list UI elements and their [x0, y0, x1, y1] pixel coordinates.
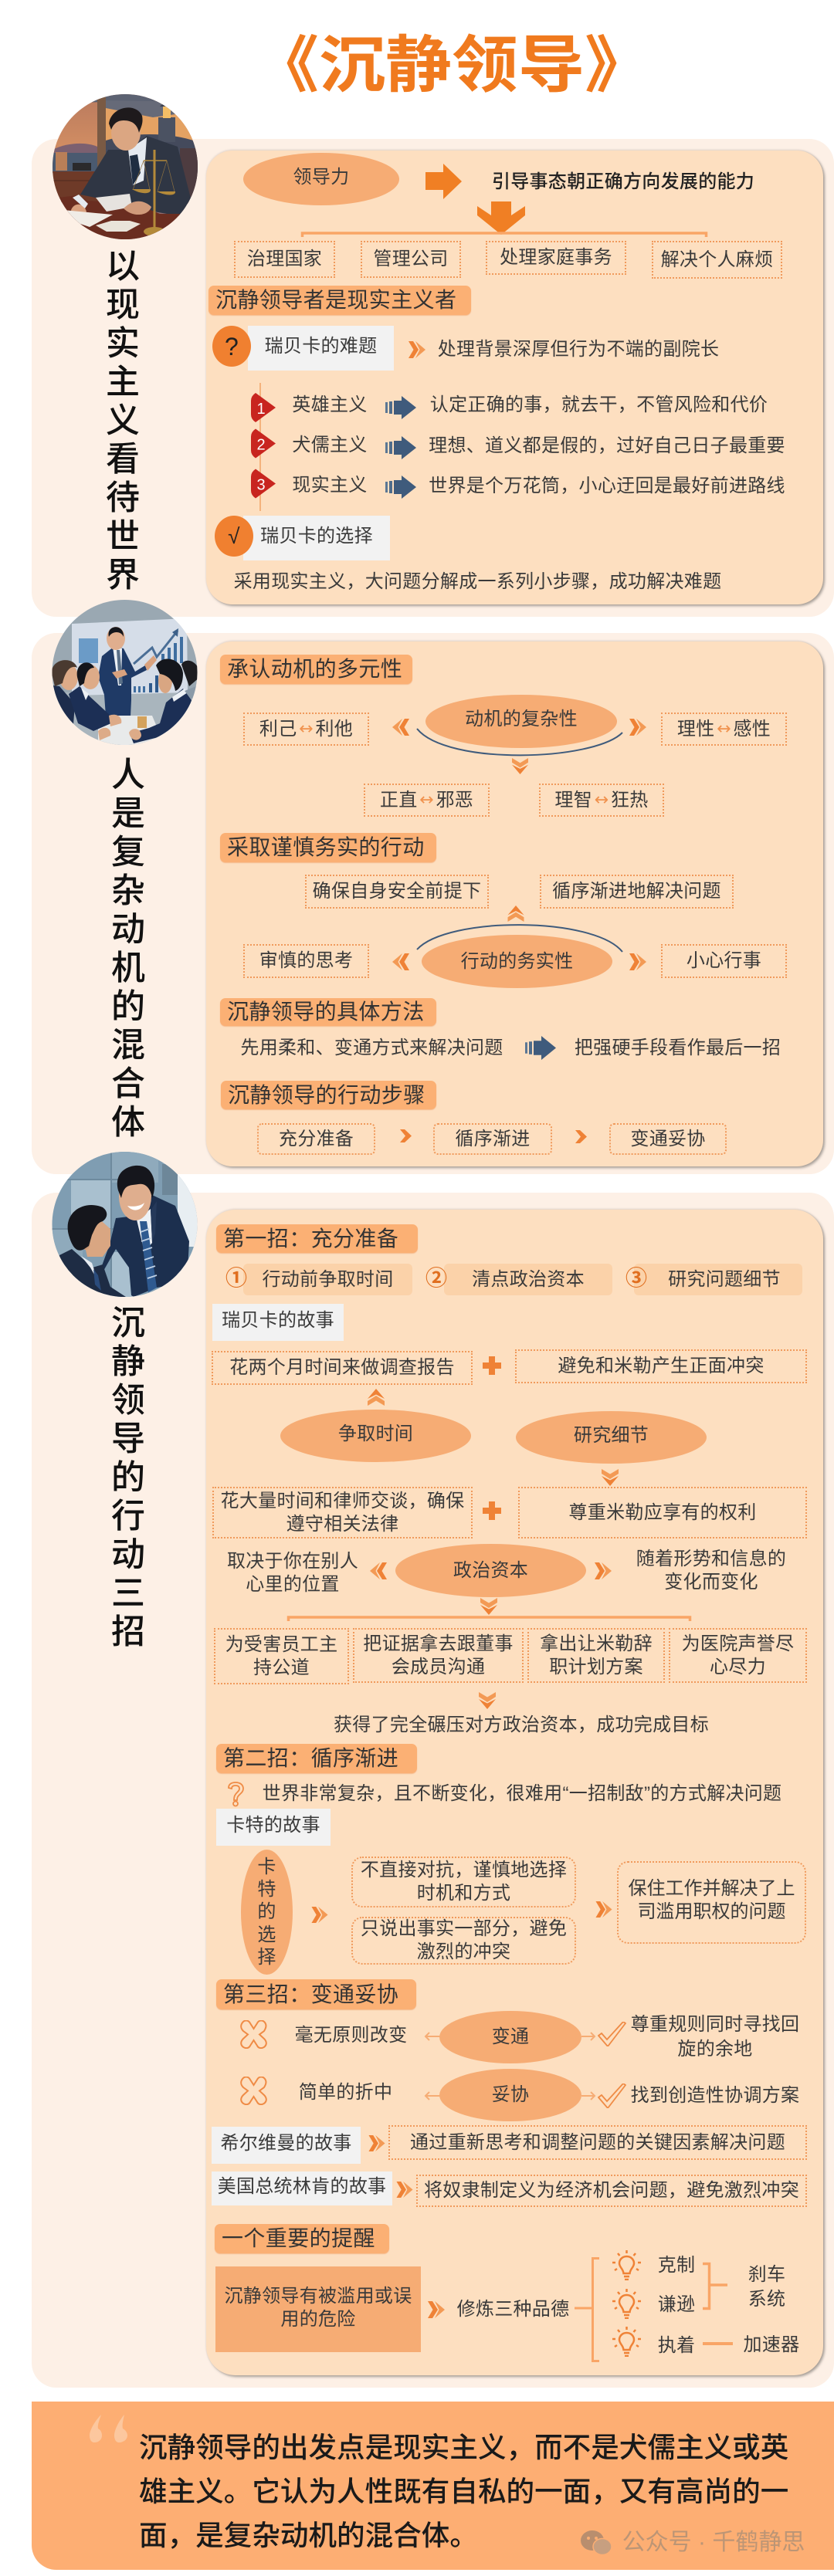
- box: 利己利他: ↔: [299, 719, 314, 738]
- box: 管理公司: 管理公司: [373, 249, 449, 269]
- text: 克制: 克制: [658, 2255, 695, 2276]
- heading: 第一招: 第一招：充分准备: [223, 1226, 398, 1251]
- label box: 瑞贝卡的难题: 瑞贝卡的难题: [265, 336, 377, 357]
- box: 处理家庭事务: [486, 241, 626, 275]
- icon: chevron: [400, 1129, 412, 1142]
- box: 保住工作: [617, 1861, 806, 1944]
- box: 滥用危险: [215, 2266, 421, 2352]
- ellipse: 政治资本: 政治资本: [453, 1559, 528, 1581]
- illustration: 会议演讲: [53, 600, 198, 745]
- ellipse: 行动的务实性: 行动的务实性: [461, 951, 573, 971]
- text: 尊重规则: 尊重规则同时寻找回: [631, 2014, 799, 2035]
- ellipse: 变通: [439, 2011, 581, 2063]
- text: 现实主义定义: 世界是个万花筒，小心迂回是最好前进路线: [429, 476, 785, 496]
- box: 律师交谈: 花大量时间和律师交谈，确保: [221, 1490, 464, 1511]
- section heading: 以现实主义看待世界: 以现实主义看待世界: [100, 248, 138, 595]
- text: 选择结果: 采用现实主义，大问题分解成一系列小步骤，成功解决难题: [234, 571, 721, 592]
- box: 只说出部分事实: 只说出事实一部分，避免: [361, 1918, 567, 1939]
- box: 尊重权利: 尊重米勒应享有的权利: [568, 1502, 757, 1522]
- item box: 清点政治资本: 清点政治资本: [472, 1269, 585, 1289]
- arrow: right small: [581, 2032, 596, 2041]
- icon: check: [598, 2083, 626, 2108]
- ellipse: 妥协: 妥协: [492, 2084, 529, 2105]
- icon: chevrons right: [629, 953, 646, 970]
- box: 医院声誉: 心尽力: [710, 1657, 766, 1677]
- marker: 2: 2: [256, 437, 266, 454]
- box: 滥用危险: 用的危险: [280, 2309, 356, 2330]
- label box: 瑞贝卡的故事: 瑞贝卡的故事: [222, 1310, 334, 1331]
- box: 审慎的思考: [243, 944, 369, 978]
- arrow: blue: [385, 476, 416, 499]
- icon: chevrons up: [368, 1389, 385, 1406]
- box: 董事会: [353, 1628, 524, 1683]
- icon: chevrons up: [508, 905, 524, 922]
- box: 保住工作: 保住工作并解决了上: [629, 1877, 795, 1899]
- heading: 沉静领导的具体方法: 沉静领导的具体方法: [227, 1000, 425, 1024]
- ellipse: 争取时间: [280, 1410, 471, 1462]
- box: 不直接对抗: [351, 1857, 576, 1907]
- box: 治理国家: 治理国家: [247, 249, 322, 269]
- icon: plus: [483, 1356, 501, 1375]
- heading: 沉静领导的行动步骤: 沉静领导的行动步骤: [228, 1082, 425, 1107]
- inner panel: 动机与行动: [206, 641, 823, 1166]
- text: 公众号: 公众号 · 千鹤静思: [622, 2530, 805, 2555]
- box: 审慎的思考: 审慎的思考: [259, 950, 353, 971]
- panel: 总结: [32, 2402, 834, 2570]
- label box: 瑞贝卡的难题: [248, 326, 394, 371]
- box: 处理家庭事务: 处理家庭事务: [500, 247, 612, 268]
- ellipse: 争取时间: 争取时间: [338, 1423, 413, 1444]
- heading: 一个重要的提醒: 一个重要的提醒: [222, 2226, 375, 2250]
- watermark: [581, 2529, 809, 2557]
- text: 尊重规则: 旋的余地: [677, 2039, 753, 2060]
- icon: chevrons down: [480, 1598, 497, 1615]
- icon: quotation mark: [90, 2415, 128, 2442]
- box: 理智狂热: 理智 狂热: [554, 789, 649, 811]
- box: 小心行事: [661, 944, 787, 978]
- box: 解决个人麻烦: 解决个人麻烦: [661, 249, 773, 270]
- text: 强硬手段: 把强硬手段看作最后一招: [575, 1038, 781, 1058]
- icon: chevrons right: [596, 1901, 612, 1918]
- icon: chevrons left: [392, 719, 409, 736]
- box: 理智狂热: ↔: [595, 790, 609, 809]
- arrow: right small: [581, 2091, 596, 2100]
- box: 循序渐进: 循序渐进: [455, 1129, 531, 1149]
- label box: 美国总统林肯的故事: 美国总统林肯的故事: [218, 2176, 386, 2197]
- box: 充分准备: 充分准备: [279, 1129, 354, 1149]
- label box: 美国总统林肯的故事: [212, 2171, 392, 2205]
- box: 董事会: 把证据拿去跟董事: [363, 1633, 514, 1654]
- icon: chevrons down: [479, 1692, 496, 1709]
- ellipse: 领导力: 领导力: [293, 167, 349, 188]
- box: 利己利他: [243, 713, 369, 746]
- heading: 第二招: 第二招：循序渐进: [223, 1746, 398, 1770]
- icon: number 2: ②: [425, 1266, 447, 1290]
- ellipse: 卡特的选择: 卡: [257, 1857, 276, 1877]
- arc under ellipse: [416, 728, 623, 757]
- box: 医院声誉: 为医院声誉尽: [682, 1633, 794, 1654]
- arc over ellipse: [416, 924, 623, 953]
- heading: 第三招: 第三招：变通妥协: [223, 1982, 398, 2006]
- box: 变通妥协: 变通妥协: [630, 1129, 706, 1149]
- text: 随形势变化: [636, 1549, 786, 1593]
- heading: 承认动机的多元性: 承认动机的多元性: [227, 657, 402, 681]
- text: 英雄主义定义: 认定正确的事，就去干，不管风险和代价: [430, 394, 768, 415]
- box: 小心行事: 小心行事: [687, 950, 761, 971]
- icon: chevrons down: [602, 1469, 619, 1486]
- text: 刹车系统: 刹车: [748, 2264, 785, 2285]
- branch line: [287, 1616, 692, 1621]
- icon: chevrons left: [370, 1562, 387, 1579]
- ellipse: 动机的复杂性: [425, 695, 617, 748]
- ellipse: 卡特的选择: 择: [257, 1947, 276, 1968]
- icon: question outline: [228, 1782, 244, 1806]
- marker: 1: 1: [256, 401, 266, 418]
- icon: cross: [240, 2020, 267, 2049]
- box: 管理公司: [361, 241, 461, 278]
- heading: 采取谨慎务实的行动: 采取谨慎务实的行动: [227, 835, 425, 859]
- box: 受害员工: 持公道: [253, 1657, 310, 1678]
- arrow: right: [425, 164, 462, 199]
- box: 循序渐进地解决问题: 循序渐进地解决问题: [552, 881, 721, 902]
- panel: 人是复杂动机的混合体: [32, 633, 834, 1174]
- box: 尊重权利: [518, 1487, 807, 1538]
- text: 犬儒主义定义: 理想、道义都是假的，过好自己日子最重要: [429, 435, 785, 456]
- box: 医院声誉: [669, 1628, 807, 1683]
- ellipse: 卡特的选择: [241, 1850, 293, 1975]
- box: 律师交谈: 遵守相关法律: [286, 1513, 398, 1535]
- text: 随形势变化: 随着形势和信息的: [636, 1549, 786, 1569]
- ellipse: 领导力: [243, 153, 399, 205]
- icon: chevrons left: [392, 953, 409, 970]
- box: 律师交谈: [212, 1487, 473, 1538]
- text: 世界复杂: 世界非常复杂，且不断变化，很难用“一招制敌”的方式解决问题: [263, 1783, 781, 1804]
- branch line: [301, 232, 707, 237]
- heading: 第三招: [216, 1979, 416, 2009]
- box: 正直邪恶: [364, 784, 490, 817]
- icon: check mark: √: [228, 523, 240, 548]
- item box: 行动前争取时间: [243, 1264, 412, 1295]
- icon: chevrons right: [312, 1907, 327, 1923]
- icon: wechat: [581, 2530, 612, 2555]
- text: 总结: [139, 2425, 803, 2557]
- box: 重新思考: [388, 2125, 807, 2160]
- box: 循序渐进: [433, 1123, 552, 1155]
- bracket: 刹车系统: [703, 2263, 728, 2310]
- text: 现实主义: 现实主义: [292, 475, 368, 496]
- bracket: 三种品德: [575, 2257, 600, 2362]
- label box: 希尔维曼的故事: 希尔维曼的故事: [220, 2133, 352, 2154]
- inner panel: 三招详解: [206, 1210, 823, 2375]
- box: 辞职方案: 职计划方案: [549, 1657, 643, 1677]
- marker: 3: [251, 469, 276, 499]
- text: 创造性协调方案: 找到创造性协调方案: [631, 2085, 799, 2106]
- text: 取决于位置: 心里的位置: [246, 1574, 340, 1595]
- box: 变通妥协: [609, 1123, 727, 1155]
- box: 理性感性: [661, 713, 787, 746]
- box: 避免冲突: 避免和米勒产生正面冲突: [558, 1356, 764, 1376]
- ellipse: 卡特的选择: 的: [257, 1901, 276, 1922]
- text: 刹车系统: [744, 2264, 790, 2310]
- icon: number 1: ①: [225, 1266, 247, 1290]
- box: 正直邪恶: 正直 邪恶: [380, 789, 473, 811]
- icon: question mark: ?: [225, 332, 239, 360]
- illustration: 两位商务人士: [53, 1152, 198, 1297]
- text: 总结: 沉静领导的出发点是现实主义，而不是犬儒主义或英: [139, 2432, 788, 2463]
- arrow: blue: [525, 1036, 556, 1060]
- icon: bulb: [612, 2250, 642, 2280]
- timeline spine: [259, 383, 261, 511]
- text: 先用柔和: 先用柔和、变通方式来解决问题: [240, 1038, 503, 1058]
- label box: 瑞贝卡的故事: [212, 1304, 344, 1341]
- box: 循序渐进地解决问题: [540, 875, 734, 909]
- text: 总结: 面，是复杂动机的混合体。: [139, 2520, 478, 2551]
- box: 调查报告: [212, 1351, 473, 1385]
- arrow: down: [477, 201, 525, 235]
- ellipse: 行动的务实性: [422, 935, 612, 988]
- ellipse: 动机的复杂性: 动机的复杂性: [465, 709, 578, 729]
- box: 辞职方案: 拿出让米勒辞: [540, 1633, 653, 1654]
- icon: question mark: [212, 326, 251, 367]
- label box: 卡特的故事: [216, 1809, 331, 1846]
- box: 不直接对抗: 时机和方式: [417, 1883, 510, 1904]
- box: 受害员工: [214, 1628, 349, 1684]
- text: 领导力定义: 引导事态朝正确方向发展的能力: [492, 171, 754, 192]
- inner panel: 领导力与现实主义: [206, 151, 823, 604]
- box: 保住工作: 司滥用职权的问题: [638, 1901, 786, 1922]
- text: 取决于位置: 取决于你在别人: [227, 1551, 358, 1572]
- box: 只说出部分事实: 激烈的冲突: [417, 1941, 510, 1962]
- box: 奴隶制: [416, 2175, 807, 2207]
- box: 确保自身安全前提下: [305, 875, 489, 909]
- icon: chevrons right: [595, 1562, 612, 1579]
- box: 重新思考: 通过重新思考和调整问题的关键因素解决问题: [410, 2132, 785, 2152]
- section heading: 沉静领导的行动三招: 沉静领导的行动三招: [106, 1305, 144, 1652]
- ellipse: 变通: 变通: [492, 2026, 529, 2047]
- icon: number 3: ③: [626, 1266, 647, 1290]
- ellipse: 政治资本: [395, 1544, 586, 1597]
- arrow: left small: [424, 2091, 440, 2100]
- illustration: 律师与天平: [53, 94, 198, 239]
- box: 受害员工: 为受害员工主: [225, 1633, 337, 1655]
- ellipse: 研究细节: 研究细节: [574, 1425, 649, 1446]
- box: 充分准备: [257, 1123, 375, 1155]
- icon: bulb: [612, 2327, 642, 2357]
- text: 简单的折中: 简单的折中: [299, 2082, 392, 2103]
- label box: 希尔维曼的故事: [212, 2127, 361, 2164]
- arrow: blue: [385, 396, 416, 419]
- box: 利己利他: 利己 利他: [259, 718, 353, 740]
- arrow: blue: [385, 436, 416, 459]
- icon: chevron: [575, 1130, 587, 1143]
- box: 只说出部分事实: [351, 1917, 576, 1965]
- box: 调查报告: 花两个月时间来做调查报告: [229, 1357, 455, 1378]
- box: 董事会: 会成员沟通: [392, 1657, 485, 1677]
- text: 副院长: 处理背景深厚但行为不端的副院长: [438, 339, 719, 360]
- box: 滥用危险: 沉静领导有被滥用或误: [224, 2286, 412, 2307]
- box: 奴隶制: 将奴隶制定义为经济机会问题，避免激烈冲突: [424, 2180, 799, 2201]
- ellipse: 卡特的选择: 选: [257, 1924, 276, 1945]
- label box: 瑞贝卡的选择: 瑞贝卡的选择: [260, 526, 373, 547]
- item box: 研究问题细节: 研究问题细节: [668, 1269, 781, 1289]
- title: 《沉静领导》: [253, 31, 651, 100]
- icon: plus: [483, 1501, 501, 1520]
- text: 英雄主义: 英雄主义: [292, 394, 368, 415]
- box: 辞职方案: [527, 1628, 665, 1683]
- box: 避免冲突: [515, 1349, 807, 1383]
- text: 取决于位置: [227, 1551, 358, 1595]
- icon: cross: [239, 2077, 268, 2105]
- icon: chevrons right: [428, 2300, 445, 2319]
- arrow: left small: [425, 2032, 440, 2041]
- icon: check: [598, 2022, 626, 2046]
- icon: chevrons: [409, 341, 425, 358]
- ellipse: 研究细节: [516, 1411, 707, 1464]
- marker: 2: [251, 429, 276, 459]
- item box: 清点政治资本: [444, 1264, 612, 1295]
- box: 理性感性: 理性 感性: [677, 718, 771, 740]
- item box: 研究问题细节: [634, 1264, 802, 1295]
- connector line: [703, 2342, 733, 2345]
- panel: 以现实主义看待世界: [32, 139, 834, 617]
- text: 执着: 执着: [658, 2335, 695, 2356]
- text: 毫无原则改变: 毫无原则改变: [295, 2025, 407, 2046]
- icon: chevrons right: [629, 719, 646, 736]
- text: 犬儒主义: 犬儒主义: [292, 435, 368, 455]
- marker: 1: [251, 393, 276, 422]
- icon: chevrons down: [512, 758, 528, 774]
- text: 随形势变化: 变化而变化: [664, 1572, 758, 1593]
- label box: 瑞贝卡的选择: [243, 516, 390, 560]
- icon: bulb: [612, 2289, 642, 2319]
- text: 修炼三种品德: 修炼三种品德: [457, 2299, 569, 2320]
- marker: 3: 3: [256, 477, 266, 494]
- icon: check mark: [215, 516, 253, 557]
- box: 理性感性: ↔: [717, 719, 731, 738]
- panel: 沉静领导的行动三招: [32, 1193, 834, 2388]
- icon: chevrons right: [368, 2134, 385, 2152]
- text: 加速器: 加速器: [744, 2334, 799, 2355]
- ellipse: 卡特的选择: 特: [257, 1879, 276, 1900]
- item box: 行动前争取时间: 行动前争取时间: [262, 1269, 394, 1289]
- text: 总结: 雄主义。它认为人性既有自私的一面，又有高尚的一: [139, 2476, 788, 2507]
- text: 谦逊: 谦逊: [658, 2294, 695, 2315]
- text: 尊重规则: [631, 2014, 799, 2060]
- box: 正直邪恶: ↔: [419, 790, 434, 809]
- ellipse: 妥协: [439, 2069, 581, 2121]
- text: 成功完成目标: 获得了完全碾压对方政治资本，成功完成目标: [334, 1715, 709, 1735]
- box: 不直接对抗: 不直接对抗，谨慎地选择: [361, 1860, 567, 1880]
- box: 确保自身安全前提下: 确保自身安全前提下: [313, 881, 481, 902]
- heading: 沉静领导者是现实主义者: 沉静领导者是现实主义者: [215, 288, 456, 312]
- icon: chevrons right: [396, 2181, 413, 2199]
- section heading: 人是复杂动机的混合体: 人是复杂动机的混合体: [106, 757, 144, 1142]
- box: 解决个人麻烦: [652, 241, 782, 279]
- box: 治理国家: [234, 241, 335, 278]
- label box: 卡特的故事: 卡特的故事: [226, 1815, 320, 1836]
- box: 理智狂热: [539, 784, 664, 817]
- text: 刹车系统: 系统: [748, 2289, 785, 2310]
